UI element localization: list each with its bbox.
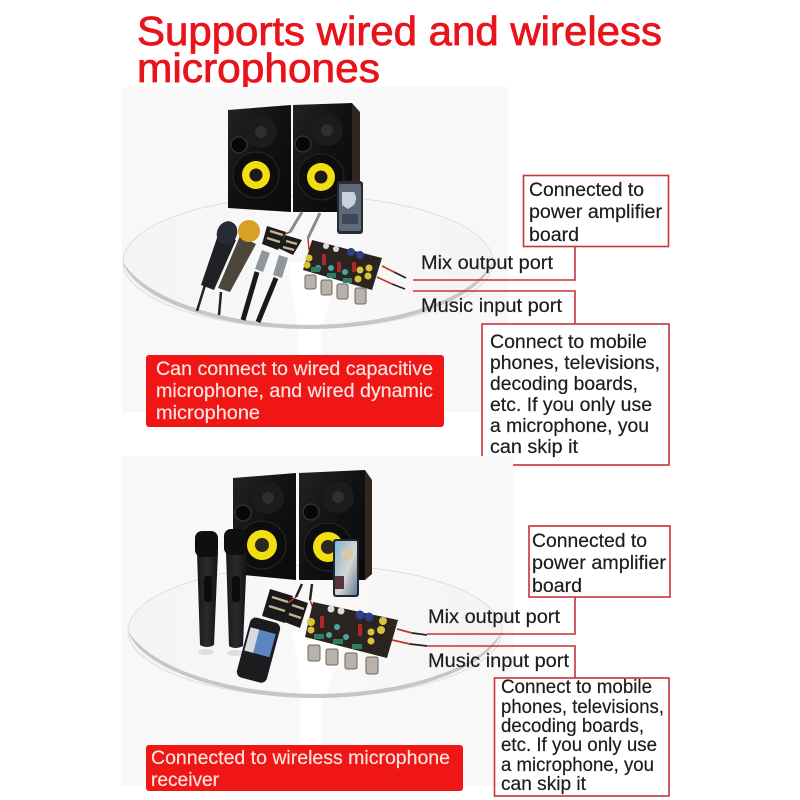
knobs — [305, 275, 366, 304]
callout: wired microphones: microphone — [156, 403, 260, 424]
callout: wired microphones: Can connect to wired capacitive — [156, 359, 433, 380]
label: connect to mobile phones: etc. If you only use — [490, 395, 652, 416]
label: connected to power amplifier board — [529, 526, 670, 597]
callout: wireless receiver — [146, 745, 463, 791]
circuit board — [305, 602, 398, 674]
jack sockets — [262, 584, 315, 628]
label: connected to power amplifier board — [524, 176, 668, 246]
connector lines: bottom — [427, 597, 575, 678]
table — [128, 565, 502, 786]
title — [137, 8, 662, 91]
label: connected to power amplifier board: power amplifier — [532, 553, 667, 574]
wireless receiver — [235, 616, 281, 684]
label: connected to power amplifier board: Connected to — [529, 180, 644, 201]
speakers — [233, 470, 372, 580]
label: connect to mobile phones: phones, televisions, — [501, 697, 664, 718]
icon: phone — [333, 539, 359, 597]
microphone 2 — [224, 529, 247, 656]
label: mix output port: Mix output port — [421, 253, 554, 274]
panel: wireless microphones — [122, 456, 513, 791]
label: connect to mobile phones: can skip it — [501, 774, 587, 795]
label: connect to mobile phones: a microphone, you — [501, 755, 654, 776]
title: Supports wired and wireless — [137, 8, 662, 54]
label: connect to mobile phones — [494, 677, 669, 796]
circuit board — [303, 240, 382, 304]
label: connect to mobile phones: phones, televisions, — [490, 353, 660, 374]
callout: wired microphones: microphone, and wired dynamic — [156, 381, 433, 402]
microphone 1 — [195, 531, 218, 655]
title: microphones — [137, 45, 380, 91]
panel background — [122, 456, 513, 786]
output wires — [377, 266, 406, 289]
label: connect to mobile phones: can skip it — [490, 437, 579, 458]
label: connect to mobile phones: etc. If you only use — [501, 735, 657, 756]
gold microphone — [218, 217, 263, 315]
callout: wired microphones — [146, 355, 444, 427]
label: mix output port: Mix output port — [428, 607, 561, 628]
knobs — [308, 645, 378, 674]
label: connected to power amplifier board: board — [529, 225, 579, 246]
label: connected to power amplifier board: power amplifier — [529, 202, 663, 223]
speaker cables — [280, 212, 320, 250]
label: music input port: Music input port — [421, 296, 563, 317]
black microphone — [197, 218, 241, 311]
left speaker — [233, 473, 296, 580]
table — [123, 196, 493, 412]
label: connect to mobile phones: decoding boards, — [501, 716, 644, 737]
label: connect to mobile phones: decoding boards, — [490, 374, 638, 395]
panel background — [122, 87, 508, 412]
panel: wired microphones — [122, 87, 508, 427]
jack plugs and cables — [243, 226, 302, 322]
callout: wireless receiver: Connected to wireless microphone — [151, 748, 450, 769]
label: connect to mobile phones: a microphone, you — [490, 416, 649, 437]
connector lines: top — [413, 246, 575, 324]
right speaker — [293, 103, 360, 212]
label: connect to mobile phones: Connect to mobile — [490, 332, 647, 353]
label: connect to mobile phones — [482, 324, 669, 465]
output wires — [392, 629, 427, 646]
left speaker — [228, 105, 291, 212]
right speaker — [299, 470, 372, 580]
wireless microphones — [195, 529, 247, 656]
label: music input port: Music input port — [428, 651, 570, 672]
label: connected to power amplifier board: Connected to — [532, 531, 647, 552]
callout: wireless receiver: receiver — [151, 770, 220, 791]
speakers — [228, 103, 360, 212]
label: connected to power amplifier board: board — [532, 576, 582, 597]
wired microphones — [197, 217, 263, 315]
icon: phone — [337, 181, 363, 234]
label: connect to mobile phones: Connect to mobile — [501, 677, 652, 698]
